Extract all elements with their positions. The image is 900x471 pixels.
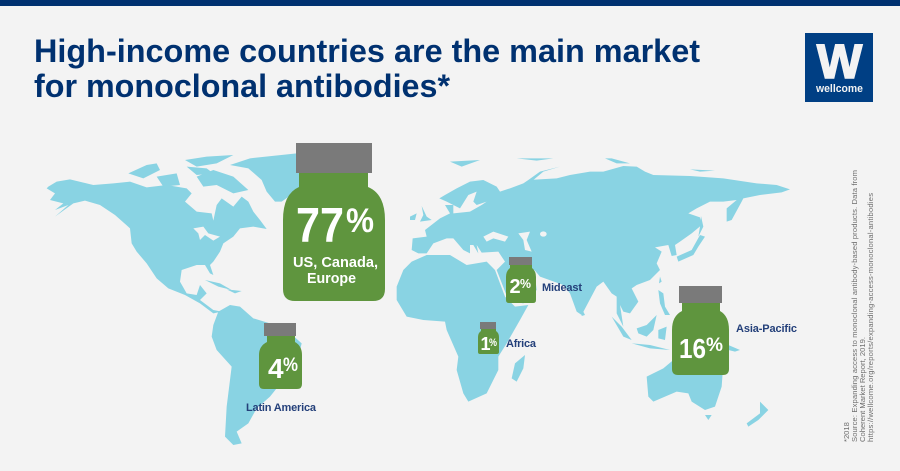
source note: Coherent Market Report, 2019. xyxy=(858,337,867,442)
source note xyxy=(842,170,875,442)
bottle: Latin America: 4 xyxy=(268,353,284,384)
bottle: Latin America: % xyxy=(283,355,298,376)
bottle: US, Canada, Europe: % xyxy=(346,202,374,240)
bottle: US, Canada, Europe xyxy=(283,143,385,301)
Cuba and Hispaniola xyxy=(205,280,242,293)
bottle: Asia-Pacific: % xyxy=(706,335,723,356)
Africa xyxy=(397,255,528,402)
world map xyxy=(47,153,790,445)
bottle: Africa xyxy=(478,322,499,354)
label: Asia-Pacific: Asia-Pacific xyxy=(736,323,797,335)
Australia xyxy=(647,360,723,410)
Americas and Greenland xyxy=(47,153,310,445)
title: for monoclonal antibodies* xyxy=(34,68,451,104)
Arctic islands xyxy=(450,158,715,180)
bottle: Asia-Pacific xyxy=(672,286,729,375)
Madagascar xyxy=(512,355,525,382)
South America xyxy=(212,305,302,445)
label: Latin America: Latin America xyxy=(246,402,317,414)
bottle: US, Canada, Europe: Europe xyxy=(307,271,356,287)
bottle: US, Canada, Europe: 77 xyxy=(296,199,344,253)
wellcome logo: W xyxy=(817,36,863,89)
bottle: Mideast xyxy=(506,257,536,303)
bottle: Africa: 1 xyxy=(480,334,491,354)
source note: *2018 xyxy=(842,422,851,442)
bottle: Asia-Pacific: 16 xyxy=(679,333,706,364)
Southeast Asia islands xyxy=(582,277,740,352)
label: Mideast: Mideast xyxy=(542,282,582,294)
bottle: US, Canada, Europe: US, Canada, xyxy=(293,255,378,271)
Japan and Sakhalin xyxy=(677,216,705,262)
Black Sea, Caspian and Aral xyxy=(483,231,547,252)
bottle: Mideast: % xyxy=(520,276,531,291)
wellcome logo: wellcome xyxy=(815,83,863,95)
Canadian Arctic islands xyxy=(128,155,248,193)
North America xyxy=(47,179,267,313)
title: High-income countries are the main market xyxy=(34,33,700,69)
source note: Source: Expanding access to monoclonal antibody-based products. Data from xyxy=(850,170,859,442)
Tasmania and New Zealand xyxy=(705,402,768,427)
label: Africa: Africa xyxy=(506,338,537,350)
Africa, Eurasia and Oceania xyxy=(397,158,790,427)
wellcome logo xyxy=(805,33,873,102)
bottle: Mideast: 2 xyxy=(510,276,521,298)
bottle: Africa: % xyxy=(489,337,497,349)
title xyxy=(34,33,700,104)
top bar xyxy=(0,0,900,6)
Britain and Ireland xyxy=(410,206,432,222)
source note: https://wellcome.org/reports/expanding-access-monoclonal-antibodies xyxy=(866,193,875,442)
Greenland xyxy=(230,153,310,202)
Eurasia xyxy=(412,166,790,327)
bottle: Latin America xyxy=(259,323,302,389)
Great Lakes xyxy=(193,227,220,241)
